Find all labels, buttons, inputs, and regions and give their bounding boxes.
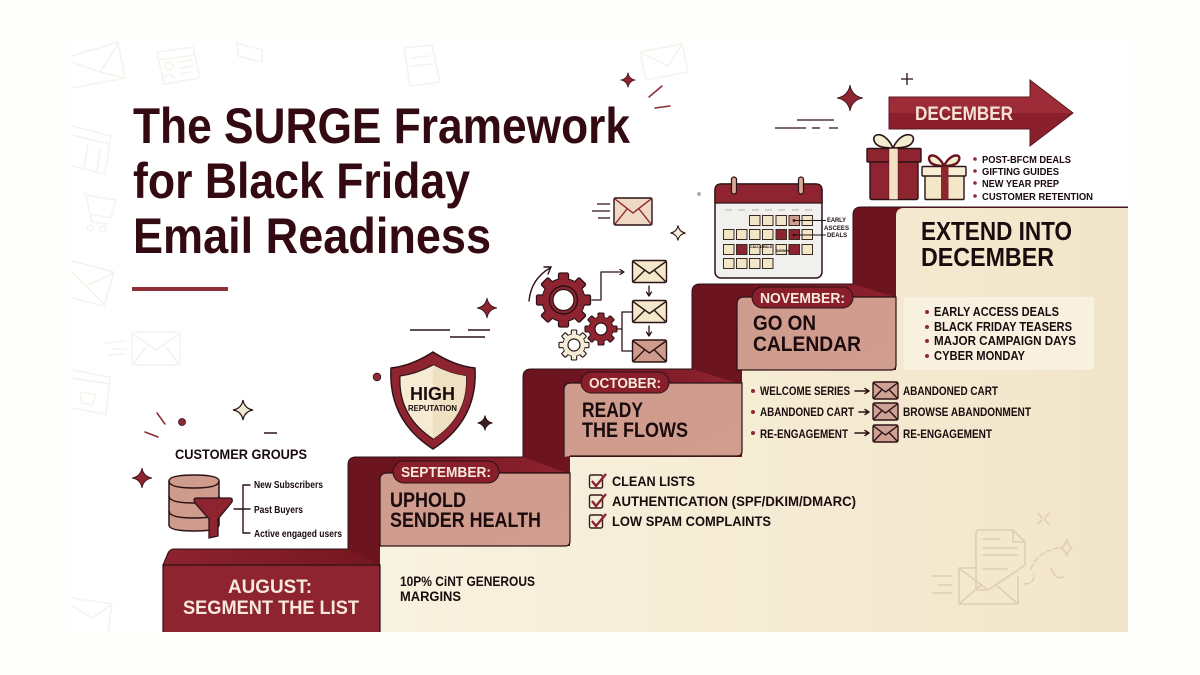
october flow list: RE-ENGAGEMENT xyxy=(903,427,993,441)
panel: september step xyxy=(380,461,570,546)
icon: gears xyxy=(529,267,617,360)
cream background of steps xyxy=(380,208,1128,632)
customer segments bracket: Active engaged users xyxy=(254,529,342,540)
icon: november calendar: DEALS xyxy=(827,232,848,239)
november badge xyxy=(752,287,853,308)
staircase silhouette xyxy=(163,207,1128,632)
december list xyxy=(973,154,1093,203)
october flow list: RE-ENGAGEMENT xyxy=(760,427,849,441)
title underline xyxy=(132,287,228,291)
icon: november calendar: CALL DEALS xyxy=(750,244,772,249)
august note xyxy=(400,574,535,604)
watermark icons background xyxy=(72,42,688,632)
september checklist: AUTHENTICATION (SPF/DKIM/DMARC) xyxy=(612,494,856,509)
october flow list: WELCOME SERIES xyxy=(760,384,850,398)
september checklist: LOW SPAM COMPLAINTS xyxy=(612,514,771,529)
august note: MARGINS xyxy=(400,589,461,604)
icon: database with funnel xyxy=(169,475,232,538)
arrow: december: DECEMBER xyxy=(915,104,1013,125)
customer segments bracket: New Subscribers xyxy=(254,480,323,491)
customer segments bracket: Past Buyers xyxy=(254,505,303,516)
september checklist: CLEAN LISTS xyxy=(612,474,695,489)
icon: november calendar: EARLY xyxy=(827,217,847,224)
title: Email Readiness xyxy=(133,208,491,264)
august note: 10P% CiNT GENEROUS xyxy=(400,574,535,589)
october flow list xyxy=(751,382,1032,442)
icon: sending envelope xyxy=(592,198,652,225)
step tread highlights xyxy=(163,284,895,565)
december list: POST-BFCM DEALS xyxy=(982,154,1071,166)
november campaign list: MAJOR CAMPAIGN DAYS xyxy=(934,334,1076,348)
november badge: NOVEMBER: xyxy=(760,291,845,307)
sparkles near customer groups xyxy=(132,400,277,488)
december list: GIFTING GUIDES xyxy=(982,166,1059,178)
icon: faint open envelope xyxy=(933,513,1072,604)
october badge xyxy=(581,372,669,393)
november campaign list: BLACK FRIDAY TEASERS xyxy=(934,320,1072,334)
icon: high reputation shield xyxy=(391,352,475,449)
customer groups heading: CUSTOMER GROUPS xyxy=(175,446,307,462)
icon: high reputation shield: REPUTATION xyxy=(408,404,457,413)
title: for Black Friday xyxy=(133,153,470,209)
arrow: december xyxy=(889,80,1073,146)
panel: extend into december heading: EXTEND INTO xyxy=(921,218,1072,246)
icon: gifts xyxy=(867,135,966,200)
panel: october step xyxy=(564,372,742,457)
panel: august step: SEGMENT THE LIST xyxy=(183,598,359,619)
icon: flow envelopes xyxy=(632,260,666,362)
october flow list: ABANDONED CART xyxy=(903,384,999,398)
customer segments bracket xyxy=(234,480,342,540)
panel: august step xyxy=(163,565,380,632)
panel: october step: READY xyxy=(582,399,643,422)
icon: november calendar xyxy=(715,177,850,278)
october badge: OCTOBER: xyxy=(589,376,661,392)
icon: november calendar: ASCEES xyxy=(824,225,850,232)
icon: november calendar: SAVINGS xyxy=(776,248,790,253)
panel: november step xyxy=(737,287,896,370)
october flow list: ABANDONED CART xyxy=(760,405,855,419)
december list: CUSTOMER RETENTION xyxy=(982,191,1093,203)
title xyxy=(133,98,630,264)
sparkles near december xyxy=(775,73,913,128)
sparkles upper middle xyxy=(620,72,701,240)
flow connectors xyxy=(592,270,652,351)
panel: september step: UPHOLD xyxy=(390,489,466,512)
panel: extend into december heading xyxy=(921,218,1072,272)
november campaign list: CYBER MONDAY xyxy=(934,349,1026,363)
icon: high reputation shield: HIGH xyxy=(410,384,455,404)
november campaign list: EARLY ACCESS DEALS xyxy=(934,305,1059,319)
october flow list: BROWSE ABANDONMENT xyxy=(903,405,1032,419)
panel: november step: CALENDAR xyxy=(753,333,861,356)
panel: august step: AUGUST: xyxy=(228,577,312,598)
september badge: SEPTEMBER: xyxy=(401,465,491,481)
november campaign list xyxy=(904,297,1094,370)
september checklist xyxy=(590,474,856,529)
december list: NEW YEAR PREP xyxy=(982,178,1059,190)
panel: october step: THE FLOWS xyxy=(582,419,688,442)
sparkles near shield xyxy=(373,298,497,430)
panel: september step: SENDER HEALTH xyxy=(390,509,541,532)
title: The SURGE Framework xyxy=(133,98,630,154)
panel: extend into december heading: DECEMBER xyxy=(921,244,1054,272)
september badge xyxy=(393,461,499,483)
panel: november step: GO ON xyxy=(753,312,816,335)
staircase top outline xyxy=(163,207,1128,565)
